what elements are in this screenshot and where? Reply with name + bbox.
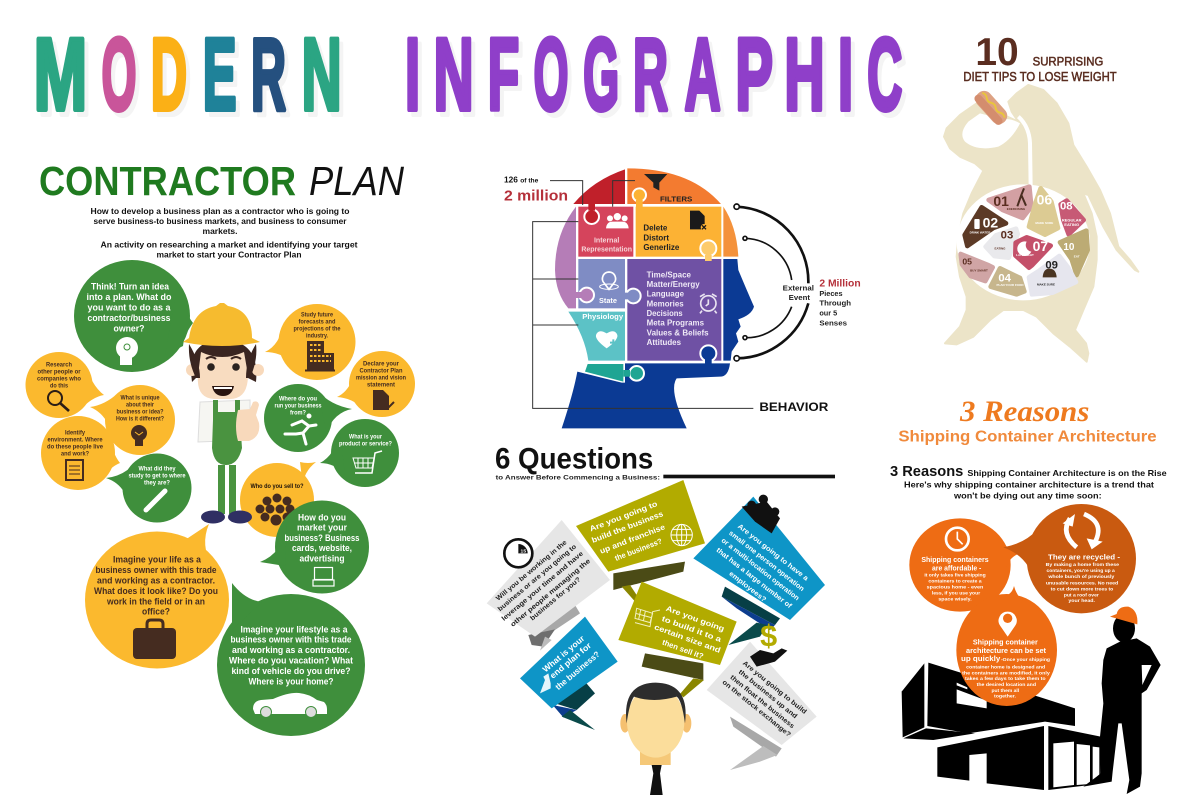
bubble: set up quickly: up quickly	[961, 654, 1001, 663]
banner: sell it	[618, 582, 737, 665]
banner: working in the business: other people managing the	[510, 558, 592, 629]
heading: 10 surprising diet tips: 10	[975, 30, 1019, 74]
panel: contractor plan	[26, 158, 415, 736]
bubble: how do you market: market your	[297, 522, 348, 532]
banner: stock exchange: then float the business	[729, 674, 796, 730]
segment numbers: 06	[1037, 191, 1052, 207]
internal representation label: Internal	[594, 236, 619, 245]
bubble: affordable: less, if you use your	[932, 591, 980, 596]
icon: document	[690, 211, 707, 231]
delete distort generalize label	[643, 224, 680, 252]
banner: one person operation	[693, 495, 825, 620]
bubble: how do you market	[260, 500, 369, 594]
title: MODERN INFOGRAPHIC: O	[102, 18, 136, 132]
banner: one person operation: employees?	[727, 571, 767, 604]
bubble: imagine your life	[85, 524, 229, 668]
banner: working in the business: Will you be working in the	[495, 539, 569, 602]
bubble: study future forecasts	[265, 304, 356, 380]
bubble: think: into a plan. What do	[86, 292, 172, 302]
bubble: how do you market: business? Business	[284, 533, 360, 543]
bubble: identify: do these people live	[47, 444, 104, 450]
icon: snail	[1038, 269, 1057, 277]
banner: one person operation: small one person operation	[727, 530, 805, 593]
figure: businessman head	[620, 683, 691, 795]
segment numbers	[962, 191, 1075, 285]
banner: franchise	[576, 480, 705, 572]
bubble: how do you market: cards, website,	[292, 543, 352, 553]
segment captions: DRINK WATER	[970, 230, 991, 234]
title: MODERN INFOGRAPHIC: I	[405, 18, 420, 132]
purple block list: Attitudes	[647, 338, 682, 347]
bubble: affordable: spacious home - even	[927, 585, 984, 590]
segment captions: EXERCISING	[1007, 207, 1026, 211]
label: filters: FILTERS	[660, 195, 692, 204]
bubble: declare	[337, 351, 415, 417]
purple block list: Language	[647, 290, 685, 299]
bubble: identify: environment. Where	[48, 436, 103, 444]
panel: head puzzle diagram	[504, 168, 861, 428]
panel: shipping container	[890, 396, 1167, 794]
banner: stock exchange: on the stock exchange?	[721, 679, 792, 739]
bubble: set up quickly: together.	[994, 694, 1016, 699]
label: external event: Event	[789, 295, 811, 302]
segment numbers: 04	[998, 273, 1012, 285]
banner: stock exchange: Are you going to build	[741, 660, 808, 716]
subheading: shipping container architecture: Shipping Container Architecture	[898, 429, 1157, 446]
label: state with pin icon	[599, 272, 618, 305]
segment numbers: 07	[1033, 238, 1048, 254]
bubble: product or service: What is your	[349, 434, 383, 440]
label: 2 million pieces: our 5	[819, 309, 837, 318]
banner: franchise: build the business	[590, 509, 665, 545]
bubble: what is unique	[90, 385, 175, 455]
bubble: think: Think! Turn an idea	[91, 282, 170, 292]
banner: franchise: Are you going to	[588, 499, 659, 533]
bubble: imagine your life: office?	[142, 606, 170, 616]
stomach segments	[961, 187, 1088, 294]
brain puzzle pieces	[555, 168, 754, 428]
icon: people	[606, 213, 629, 228]
bubble: what is unique: business or idea?	[116, 408, 164, 416]
delete distort generalize label: Generlize	[643, 243, 680, 252]
bubble: what is unique: What is unique	[120, 394, 160, 402]
bubble: think: contractor/business	[88, 313, 170, 323]
bubble: affordable: containers to create a	[928, 579, 982, 584]
banner: sell it: then sell it?	[661, 638, 705, 661]
bubble: recycled: put a roof over	[1064, 592, 1099, 597]
bubble: imagine your lifestyle: Imagine your lifestyle as a	[240, 624, 348, 634]
banner: franchise: up and franchise	[598, 522, 666, 556]
connector lines	[533, 181, 753, 408]
purple block list: Meta Programs	[647, 319, 705, 328]
bubble: study future forecasts: industry.	[306, 334, 328, 340]
segment captions: EATING	[1064, 222, 1079, 227]
banner: end plan	[520, 617, 618, 708]
segment captions: MAKE SURE	[1035, 221, 1053, 225]
purple block list: Matter/Energy	[647, 280, 700, 289]
intro text: Shipping Container Architecture is on the Rise	[967, 468, 1167, 478]
label: behavior: BEHAVIOR	[759, 400, 828, 414]
bubble: set up quickly: put them all	[991, 688, 1019, 693]
icon: alarm clock	[700, 294, 717, 313]
bubble: research: companies who	[37, 376, 81, 382]
label: external event	[783, 285, 814, 302]
bubble: think	[74, 260, 193, 372]
title: MODERN INFOGRAPHIC: I	[838, 18, 853, 132]
puzzle knobs	[575, 188, 716, 381]
panel: 6 questions	[487, 442, 835, 795]
banner: sell it: to build it to a	[661, 614, 723, 644]
title: MODERN INFOGRAPHIC: R	[251, 18, 286, 132]
banner: stock exchange	[707, 642, 817, 745]
icon: stopwatch: 15	[521, 548, 526, 554]
segment captions: REGULAR	[1062, 218, 1082, 223]
bubble: set up quickly: Shipping container	[973, 638, 1038, 647]
bubble: product or service: product or service?	[339, 442, 392, 448]
label: physiology with heart icon: Physiology	[582, 312, 624, 321]
bubble: identify: and work?	[61, 450, 89, 458]
delete distort generalize label: Distort	[643, 233, 669, 242]
bubble: recycled	[1003, 504, 1136, 613]
intro text: serve business-to business markets, and business to consumer	[94, 216, 347, 226]
heading: 10 surprising diet tips: DIET TIPS TO LOSE WEIGHT	[963, 70, 1117, 84]
bubble: product or service	[320, 419, 399, 487]
bubble: recycled: They are recycled -	[1048, 552, 1121, 561]
bubble: affordable: space wisely.	[938, 597, 972, 602]
bubble: how do you market: advertising	[300, 554, 344, 564]
stomach ring	[957, 184, 1090, 300]
bubble: imagine your lifestyle: Where is your home?	[248, 676, 334, 686]
body silhouette	[944, 85, 1138, 362]
figure: contractor character	[183, 303, 264, 524]
banner: working in the business: business or are you going to	[497, 543, 578, 613]
bubble: where do you run: run your business	[274, 404, 322, 410]
bubble: set up quickly: container home is designed and	[966, 664, 1045, 669]
title: MODERN INFOGRAPHIC: R	[633, 18, 668, 132]
bubble: declare: Declare your	[363, 360, 400, 368]
banner: one person operation: Are you going to have a	[736, 523, 809, 583]
icon: dollar in hand	[750, 619, 787, 667]
title: MODERN INFOGRAPHIC	[34, 18, 902, 132]
bubble: who do you sell to	[240, 462, 316, 537]
bubble: imagine your lifestyle: and working as a contractor.	[232, 645, 350, 655]
banner: end plan: the business?	[553, 649, 602, 692]
bubble: recycled: By making a home from these	[1046, 562, 1120, 567]
label: 2 million pieces: Pieces	[819, 289, 843, 298]
bubble: affordable: Shipping containers	[921, 555, 989, 564]
intro text: Here's why shipping container architecture is a trend that	[904, 479, 1154, 489]
panel: diet tips	[944, 30, 1138, 362]
banner: sell it: certain size and	[653, 622, 722, 655]
segment numbers: 05	[962, 257, 972, 267]
banner: stock exchange: the business up and	[737, 669, 798, 720]
title: MODERN INFOGRAPHIC: N	[302, 18, 342, 132]
segment captions: BUY SMART	[970, 269, 988, 273]
banner: end plan: end plan for	[548, 640, 594, 680]
purple block list: Time/Space	[647, 270, 692, 279]
bubble: recycled: containers, you're using up a	[1046, 568, 1115, 573]
icon: dollar in hand: $	[760, 619, 777, 653]
segment numbers: 03	[1001, 230, 1013, 242]
banner: end plan: What is your	[540, 633, 587, 674]
arm gap and oesophagus	[962, 113, 1031, 187]
bubble: affordable: It only takes five shipping	[924, 573, 986, 578]
heading: 10 surprising diet tips: SURPRISING	[1033, 55, 1103, 69]
bubble: imagine your lifestyle: kind of vehicle do you drive?	[232, 666, 350, 676]
segment numbers: 08	[1060, 200, 1073, 212]
label: 2 million pieces: Senses	[819, 318, 847, 327]
bubble: study future forecasts: Study future	[301, 312, 334, 318]
intro text	[90, 206, 358, 260]
bubble: imagine your lifestyle: Where do you vacation? What	[229, 656, 353, 666]
banner: one person operation: or a multi-location operation	[720, 537, 800, 602]
segment captions: MAKE SURE	[1037, 283, 1055, 287]
banner: franchise: the business?	[613, 536, 664, 563]
hot dog	[972, 88, 1011, 127]
segment captions: EATING	[994, 246, 1006, 250]
bubble: recycled: to cut down more trees to	[1051, 586, 1114, 591]
bubble: set up quickly: the containers are modified, it only	[962, 670, 1050, 675]
title: MODERN INFOGRAPHIC: A	[684, 18, 721, 132]
bubble: affordable	[909, 518, 1020, 612]
banner: working in the business: business for you?	[529, 576, 582, 622]
bubble: imagine your life: and working as a contractor.	[97, 576, 215, 586]
label: 126 of the 2 million	[504, 175, 568, 205]
segment numbers: 01	[993, 193, 1009, 209]
label: 2 million pieces	[819, 279, 861, 327]
segment captions: LATE NIGHT	[1016, 253, 1034, 257]
title: MODERN INFOGRAPHIC: F	[488, 18, 519, 132]
bubble: what is unique: about their	[126, 402, 155, 408]
icon: bottle	[974, 219, 980, 229]
heading: 6 questions: 6 Questions	[495, 442, 653, 475]
bubble: study future forecasts: forecasts and	[298, 320, 336, 326]
banner: one person operation: that has a large number of	[715, 547, 793, 610]
label: 126 of the 2 million: 2 million	[504, 189, 568, 205]
bubble: what is unique: How is it different?	[116, 416, 164, 422]
bubble: how do you market: How do you	[298, 512, 346, 522]
title: MODERN INFOGRAPHIC: N	[434, 18, 474, 132]
bubble: research: do this	[50, 382, 68, 390]
bubble: imagine your life: business owner with this trade	[96, 565, 216, 575]
external event arcs	[734, 204, 808, 361]
bubble: recycled: whole bunch of previously	[1047, 574, 1115, 579]
bubble: what did they study: they are?	[144, 480, 170, 486]
label: 126 of the 2 million: 126 of the	[504, 175, 539, 185]
bubble: set up quickly	[956, 586, 1057, 706]
title: MODERN INFOGRAPHIC: D	[151, 18, 187, 132]
heading: 3 reasons: 3 Reasons	[959, 396, 1089, 428]
intro text: won't be dying out any time soon:	[953, 490, 1102, 500]
title: MODERN INFOGRAPHIC: H	[784, 18, 825, 132]
title: MODERN INFOGRAPHIC: P	[735, 18, 773, 132]
title: MODERN INFOGRAPHIC: O	[534, 18, 568, 132]
intro text: 3 Reasons	[890, 464, 963, 480]
bubble: imagine your life: Imagine your life as a	[113, 554, 202, 564]
delete distort generalize label: Delete	[643, 224, 668, 233]
heading: contractor plan: PLAN	[309, 158, 404, 204]
bubble: imagine your life: What does it look like? Do you	[94, 586, 218, 596]
bubble: affordable: are affordable -	[932, 563, 982, 572]
intro text: market to start your Contractor Plan	[156, 250, 302, 260]
bubble: who do you sell to: Who do you sell to?	[250, 483, 304, 490]
bubble: imagine your life: work in the field or in an	[106, 596, 205, 606]
bubble: think: owner?	[114, 324, 144, 334]
banner ribbons	[528, 562, 782, 770]
bubble: where do you run: Where do you	[279, 396, 317, 402]
bubble: set up quickly: the desired location and	[977, 682, 1036, 687]
purple block list: Values & Beliefs	[647, 328, 709, 337]
icon: stopwatch	[504, 539, 532, 567]
purple block list: Memories	[647, 299, 684, 308]
bubble: study future forecasts: projections of the	[294, 326, 341, 332]
label: physiology with heart icon	[582, 312, 624, 348]
intro text: An activity on researching a market and identifying your target	[100, 240, 358, 250]
label: external event: External	[783, 285, 814, 292]
bubble: declare: Contractor Plan	[360, 368, 403, 374]
infographic canvas: C	[867, 18, 902, 132]
bubble: what did they study: study to get to where	[128, 474, 186, 480]
segment captions: PLAN YOUR FOOD	[997, 283, 1024, 287]
icon: runner	[1017, 188, 1026, 206]
heading: 10 surprising diet tips	[963, 30, 1117, 84]
intro text: How to develop a business plan as a contractor who is going to	[90, 206, 350, 216]
bubble: identify	[41, 416, 120, 490]
heading: 6 questions	[495, 442, 835, 481]
banner: working in the business	[487, 520, 610, 637]
bubble: recycled: your head.	[1068, 598, 1095, 603]
bubble: research: other people or	[38, 368, 81, 376]
bubble: identify: Identify	[65, 430, 86, 436]
bubble: what did they study: What did they	[138, 466, 176, 472]
segment captions: EAT	[1074, 254, 1080, 258]
segment numbers: 09	[1045, 259, 1058, 271]
purple block list	[647, 270, 709, 347]
purple block list: Decisions	[647, 309, 683, 318]
bubble: imagine your lifestyle	[217, 583, 365, 736]
title: MODERN INFOGRAPHIC: M	[34, 18, 87, 132]
bubble: imagine your lifestyle: business owner with this trade	[230, 634, 352, 644]
figure: worker silhouette	[1083, 607, 1161, 794]
segment captions	[970, 207, 1082, 287]
intro text: markets.	[202, 226, 238, 236]
bubble: declare: mission and vision	[356, 374, 406, 382]
banner: working in the business: leverage your time and have	[501, 550, 585, 623]
bubble: where do you run: from?	[290, 410, 306, 416]
label: 2 million pieces: 2 Million	[819, 279, 861, 290]
label: state with pin icon: State	[599, 296, 617, 305]
internal representation label: Representation	[581, 244, 632, 253]
bubble: think: you want to do as a	[88, 302, 171, 312]
label: 2 million pieces: Through	[819, 299, 852, 308]
bubble: research: Research	[46, 362, 72, 368]
bubble: set up quickly: architecture can be set	[966, 646, 1047, 655]
bubble: set up quickly: -Once your shipping	[1001, 657, 1050, 663]
title: MODERN INFOGRAPHIC: G	[583, 18, 619, 132]
heading: 6 questions: to Answer Before Commencing a Business:	[496, 474, 660, 481]
bubble: recycled: unusable resources. No need	[1046, 580, 1118, 585]
banner: sell it: Are you going	[665, 604, 726, 634]
bubble: research	[26, 352, 104, 418]
segment numbers: 10	[1063, 242, 1075, 253]
bubble: declare: statement	[367, 382, 395, 388]
building silhouette	[902, 663, 1101, 790]
heading: contractor plan: CONTRACTOR	[39, 158, 296, 204]
icon: funnel	[644, 174, 667, 191]
bubble: what did they study	[106, 454, 192, 522]
icon: moon	[1017, 241, 1031, 256]
segment numbers: 02	[983, 214, 998, 230]
bubble: set up quickly: takes a few days to take them to	[965, 676, 1046, 681]
internal representation label	[581, 236, 632, 253]
bubble: where do you run	[264, 384, 352, 452]
intro text	[890, 464, 1167, 500]
title: MODERN INFOGRAPHIC: E	[203, 18, 237, 132]
